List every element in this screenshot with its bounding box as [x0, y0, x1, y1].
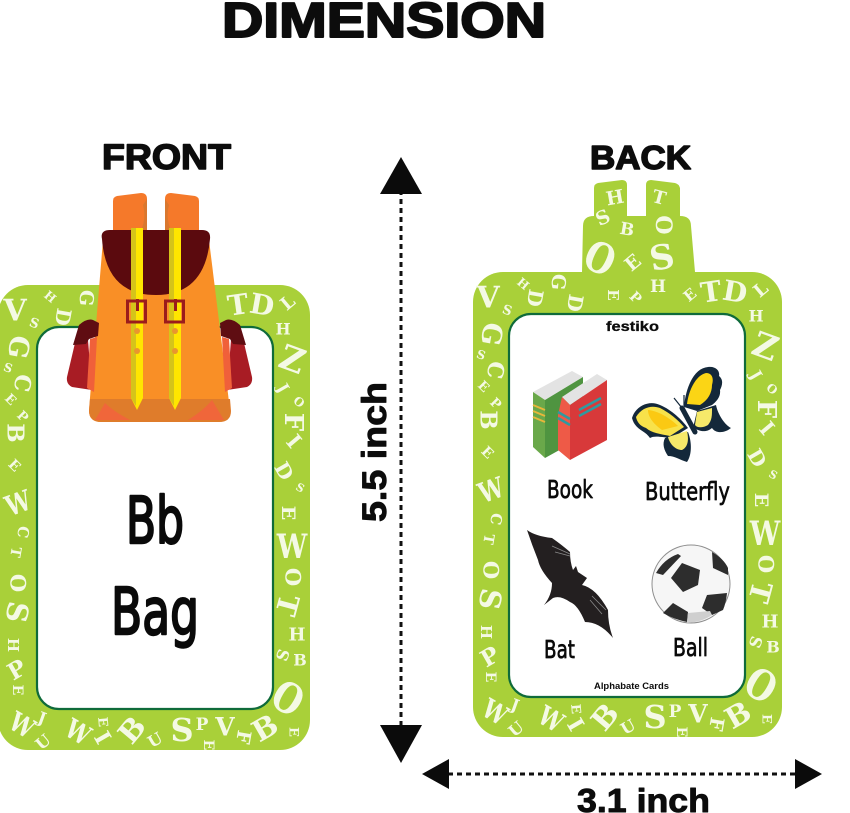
back card letter border: H [761, 612, 779, 632]
back card letter border: P [669, 702, 682, 722]
back card letter border: B [474, 410, 502, 430]
back card letter border: G [474, 320, 508, 348]
back card letter border: T [698, 274, 724, 310]
front card letter border: S [27, 315, 41, 333]
back card letter border: E [567, 703, 583, 715]
back card letter border [471, 273, 786, 741]
front card letter border: B [246, 707, 284, 749]
back card letter border: V [687, 700, 708, 728]
back card letter border: J [745, 365, 766, 383]
front card letter border: O [263, 669, 313, 727]
back card letter border: W [532, 699, 570, 739]
front card letter border: H [41, 288, 59, 306]
front card letter border: D [50, 306, 76, 328]
front card letter border: S [170, 711, 194, 749]
back card letter border: F [704, 715, 728, 733]
back card letter border: U [505, 717, 527, 741]
front card letter border: P [3, 654, 31, 686]
front card letter border: U [32, 730, 54, 754]
back card letter border: F [751, 400, 781, 419]
front card letter border: W [0, 483, 36, 523]
front card letter border: G [74, 289, 98, 307]
back card letter border: S [643, 698, 667, 736]
front card letter border: J [33, 707, 49, 728]
back card letter border: S [475, 347, 487, 363]
panel: front card [0, 285, 313, 754]
front card letter border: F [231, 728, 255, 746]
front card letter border: H [288, 624, 306, 646]
back card letter border: E [482, 672, 498, 682]
back card letter border: U [617, 715, 639, 739]
front card letter border: S [293, 480, 307, 496]
front card letter border: E [5, 457, 23, 475]
front card letter border: L [276, 291, 300, 315]
back card letter border: W [476, 692, 514, 732]
front card letter border: O [290, 393, 308, 411]
front card letter border: E [9, 685, 25, 695]
back card tab letters: O [650, 215, 676, 235]
front card letter border: T [6, 545, 24, 559]
front card letter border: I [88, 727, 116, 749]
back card letter border: I [754, 416, 780, 440]
brand: festiko: festiko [606, 318, 659, 334]
front card letter border: H [4, 638, 22, 652]
front card letter border: V [2, 294, 27, 328]
back card letter border: G [546, 273, 570, 291]
front word: Bag: Bag [111, 576, 199, 650]
front card letter border: E [286, 727, 300, 737]
back card letter border: B [719, 694, 757, 736]
caption: Alphabate Cards: Alphabate Cards [594, 681, 669, 691]
back card letter border: T [479, 532, 497, 546]
back card tab letters: B [618, 219, 636, 241]
back card tab letters: T [650, 186, 669, 210]
front card letter border: P [13, 408, 31, 426]
back card letter border: L [749, 278, 773, 302]
back card letter border: E [474, 378, 492, 396]
back card letter border: O [754, 555, 778, 573]
back card tab letters [576, 186, 678, 287]
back card letter border: H [477, 625, 495, 639]
front card letter border: U [144, 728, 166, 752]
back card letter border: H [748, 306, 764, 326]
back card letter border: P [626, 289, 645, 308]
front card letter border: T [268, 591, 306, 619]
front card letter border: I [281, 429, 307, 453]
back card letter border: H [650, 277, 666, 297]
illustration: bat [527, 530, 613, 638]
back card letter border: D [742, 444, 772, 472]
label: Ball: Ball [673, 633, 708, 662]
front card letter border: E [200, 740, 216, 750]
back card letter border: I [561, 714, 589, 736]
icon: backpack [67, 193, 252, 422]
back card letter border: B [584, 697, 626, 737]
back card letter border: E [758, 714, 774, 724]
front card letter border: B [111, 710, 153, 750]
front card letter border: V [214, 712, 235, 742]
front card letter border: E [1, 391, 19, 409]
back card letter border: C [486, 512, 506, 526]
back card letter border: W [473, 470, 509, 510]
back card letter border: T [741, 578, 779, 606]
back card tab letters: S [646, 236, 678, 280]
front card letter border: D [247, 287, 277, 323]
back card tab letters: O [576, 229, 624, 287]
arrow: vertical height [380, 157, 422, 763]
back card letter border: W [749, 514, 781, 554]
front card letter border: J [272, 378, 293, 396]
back card tab letters: S [592, 205, 614, 231]
back card letter border: C [481, 359, 509, 381]
back card letter border: S [745, 633, 767, 651]
back card letter border: B [766, 638, 780, 656]
back card letter border: E [673, 727, 689, 737]
front card letter border: E [277, 506, 299, 520]
front card letter border: S [272, 646, 294, 664]
back card letter border: V [475, 280, 500, 316]
front card letter border: W [59, 712, 97, 752]
front card letter border: W [276, 527, 308, 567]
front card letter border: H [275, 320, 291, 338]
back card letter border: E [680, 284, 700, 306]
back card letter border: S [471, 586, 509, 612]
back card letter border: H [514, 275, 532, 293]
front card letter border [0, 287, 313, 754]
front card letter border: W [3, 705, 41, 745]
back card tab letters: H [604, 186, 626, 210]
heading: front: FRONT [102, 138, 231, 177]
back card letter border: P [486, 395, 504, 413]
illustration: ball [652, 545, 730, 623]
front card letter border: Z [273, 337, 311, 383]
front card letter border: O [280, 568, 306, 586]
illustration: books [533, 371, 607, 460]
back card letter border: E [478, 444, 496, 462]
front card letter border: B [2, 423, 28, 443]
label: 5.5 inch: 5.5 inch [356, 382, 394, 522]
front card letter border: F [278, 413, 308, 432]
back card tab letters: E [620, 250, 646, 276]
back card letter border: D [522, 287, 548, 309]
front card letter border: D [269, 457, 299, 485]
label: Butterfly: Butterfly [645, 477, 730, 506]
back card letter border: J [506, 694, 522, 715]
back card letter border: D [720, 274, 750, 310]
front card letter border: C [8, 372, 36, 394]
front card letter border: S [2, 360, 14, 376]
front word: Bb: Bb [126, 485, 184, 559]
front card letter border: T [225, 287, 251, 323]
back card letter border: D [562, 292, 588, 314]
label: Bat: Bat [544, 635, 575, 664]
front card letter border: P [196, 715, 209, 735]
front card letter border: B [293, 650, 307, 670]
illustration: butterfly [632, 367, 731, 462]
back card letter border: O [736, 656, 786, 714]
back card letter border: Z [746, 324, 784, 370]
back card letter border: E [604, 289, 622, 301]
back card letter border: S [500, 302, 514, 320]
front card letter border: G [1, 333, 35, 361]
front card letter border: O [6, 574, 30, 592]
back card letter border: O [478, 561, 504, 579]
heading: back: BACK [590, 139, 691, 176]
panel: back card [471, 180, 786, 741]
back card letter border: P [476, 641, 504, 673]
back card letter border: S [766, 467, 780, 483]
front card letter border: C [13, 525, 33, 539]
back card letter border: O [763, 380, 781, 398]
back card letter border: E [750, 493, 772, 507]
arrow: horizontal width [422, 759, 822, 789]
front card letter border: E [94, 716, 110, 728]
label: Book: Book [547, 475, 593, 504]
